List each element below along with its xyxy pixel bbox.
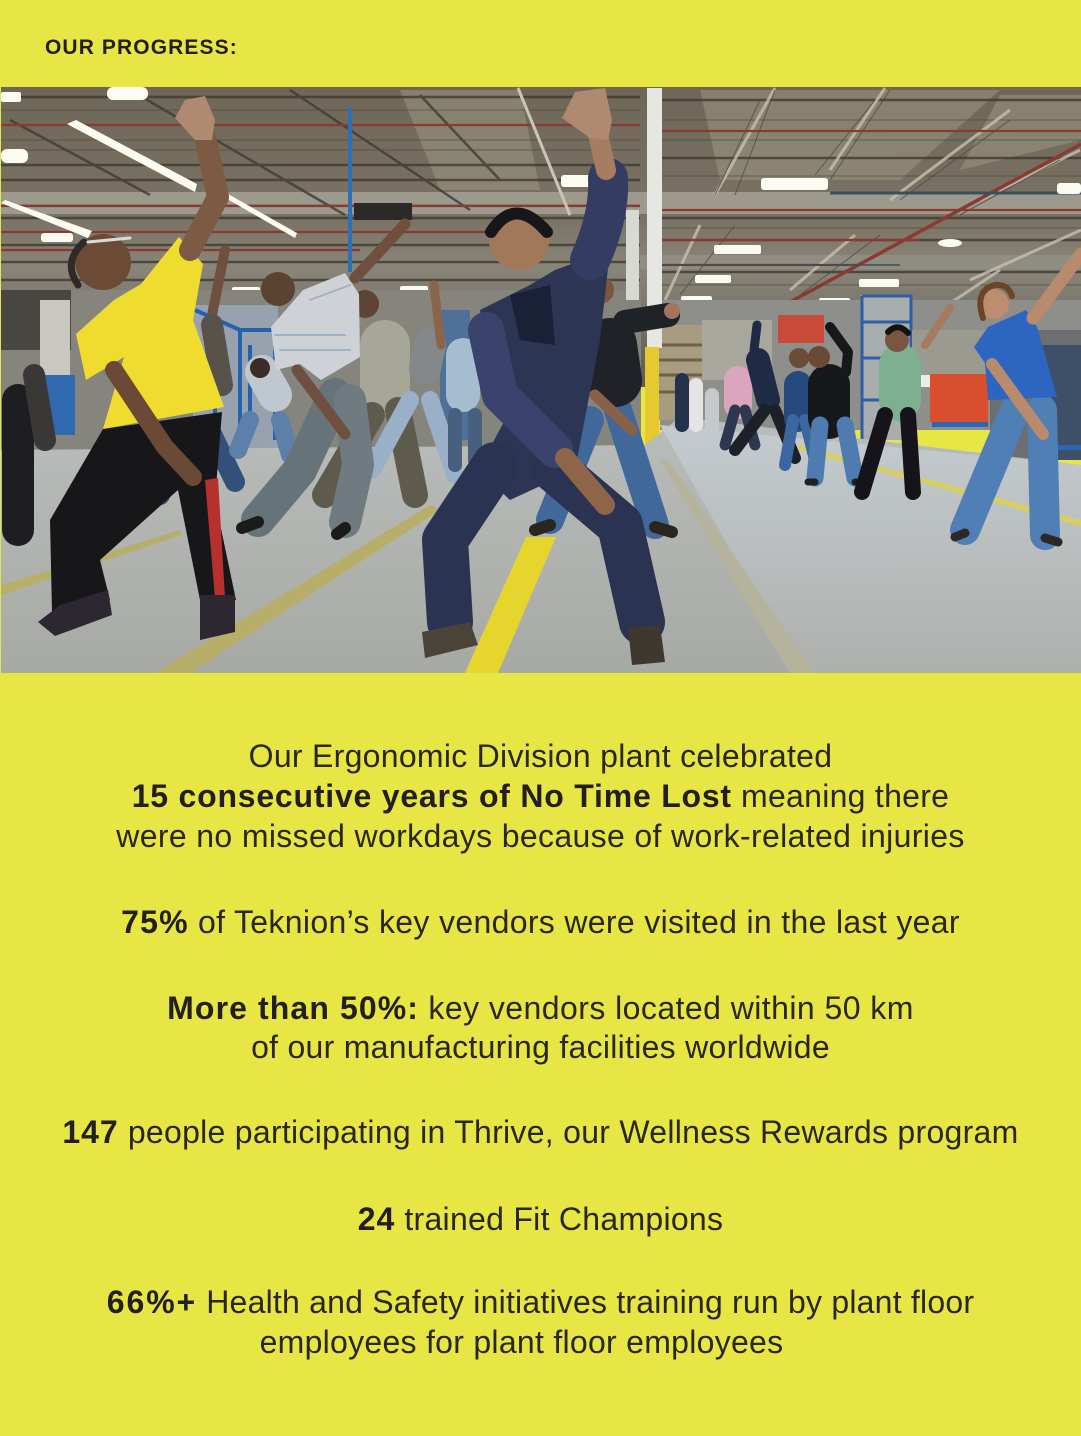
text block: vendors visited: 75% of Teknion’s key vendors were visited in the last year xyxy=(121,904,960,940)
worker in blue polo shirt xyxy=(955,254,1081,542)
text block: thrive participants: 147 people participating in Thrive, our Wellness Rewards program xyxy=(62,1114,1019,1150)
bending man xyxy=(262,372,275,395)
text block: no time lost: were no missed workdays because of work-related injuries xyxy=(116,818,965,854)
worker in navy coveralls xyxy=(422,88,665,665)
background workers left and centre xyxy=(18,250,680,532)
text block: health and safety training: 66%+ Health and Safety initiatives training run by plant floor xyxy=(107,1284,974,1320)
ceiling xyxy=(1,87,1081,387)
text block: local vendors xyxy=(167,990,914,1065)
grey shirt men behind xyxy=(360,345,410,390)
text block: no time lost: 15 consecutive years of No Time Lost meaning there xyxy=(132,778,949,814)
text block: fit champions: 24 trained Fit Champions xyxy=(358,1201,723,1237)
black shirt man behind centre xyxy=(550,410,655,525)
text block: local vendors: More than 50%: key vendors located within 50 km xyxy=(167,990,914,1026)
line of background workers on the right xyxy=(682,308,950,492)
background racks and shelving xyxy=(1,88,1081,460)
factory floor xyxy=(1,417,1081,673)
text block: no time lost xyxy=(116,738,965,854)
green shirt woman xyxy=(879,365,921,400)
text block: no time lost: Our Ergonomic Division plant celebrated xyxy=(249,738,832,774)
text block: local vendors: of our manufacturing facilities worldwide xyxy=(251,1029,830,1065)
photo: factory workers stretching on the plant floor xyxy=(1,87,1081,673)
worker in yellow shirt xyxy=(38,96,236,640)
text block: health and safety training: employees for plant floor employees xyxy=(260,1324,783,1360)
heading: our progress: OUR PROGRESS: xyxy=(45,36,238,59)
worker in striped shirt xyxy=(242,224,405,534)
text block: health and safety training xyxy=(107,1284,974,1360)
